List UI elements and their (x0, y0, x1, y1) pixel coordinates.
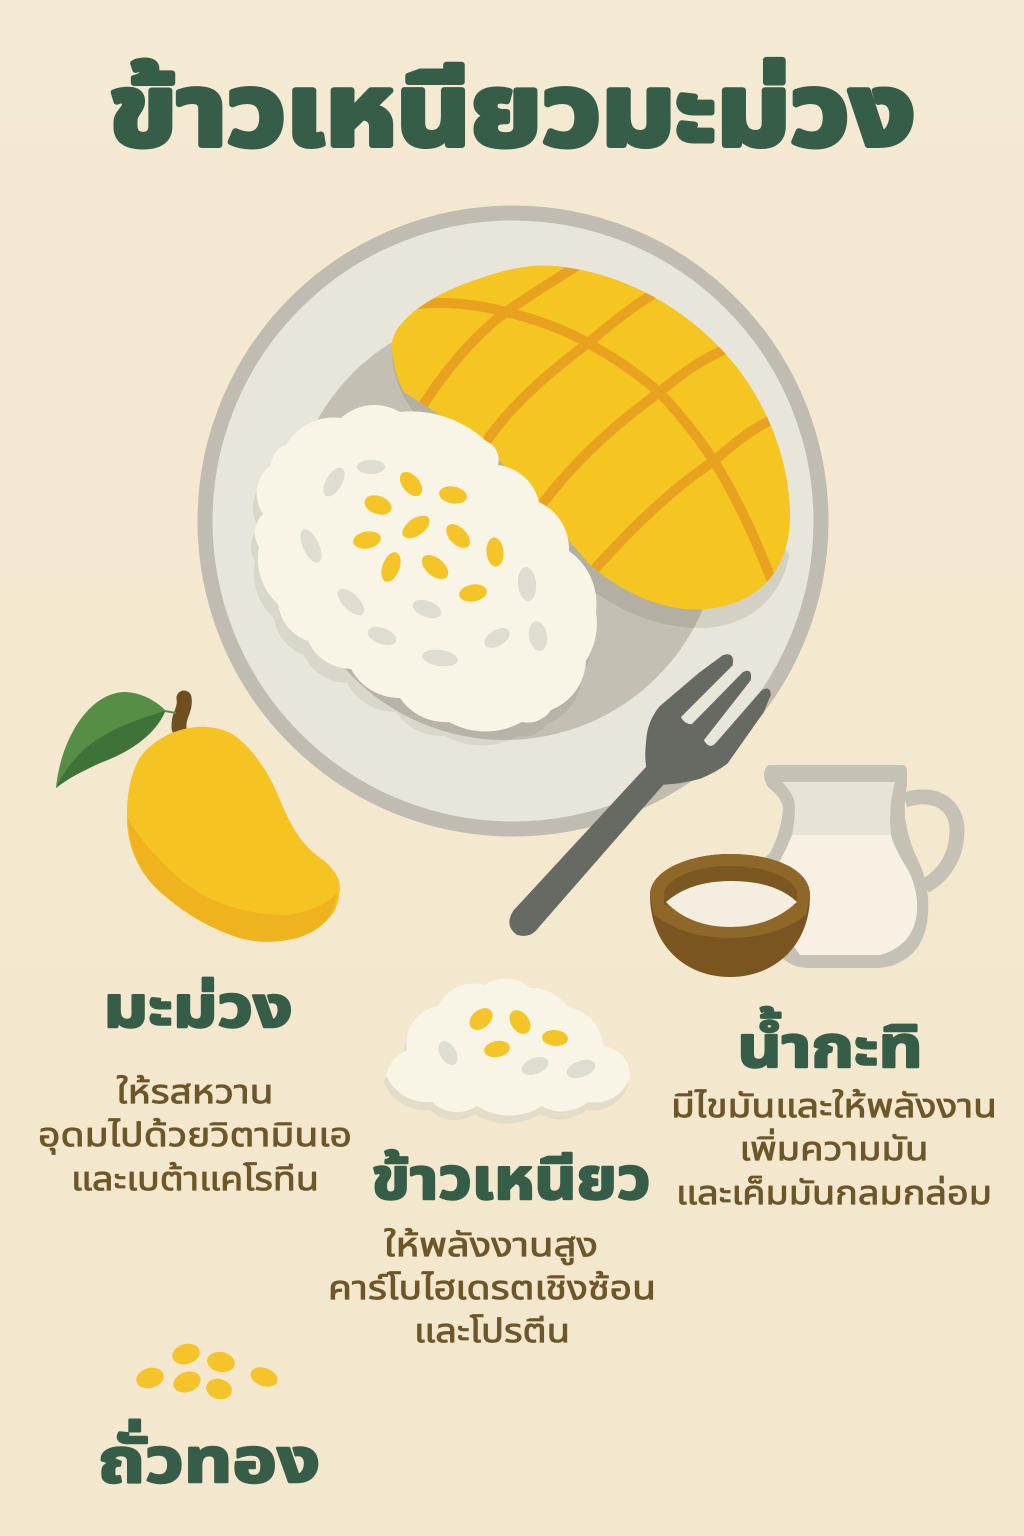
mango body (127, 727, 340, 942)
sticky rice mound (255, 405, 597, 731)
mango shadow (392, 345, 789, 628)
text: sticky rice description: และโปรตีน (414, 1312, 570, 1349)
heading: mung beans: ถั่วทอง (98, 1419, 320, 1496)
plate (205, 213, 821, 829)
heading: mango: มะม่วง (104, 975, 292, 1040)
whole mango with leaf (56, 692, 340, 942)
text: sticky rice description: คาร์โบไฮเดรตเชิงซ้อน (328, 1269, 656, 1306)
text: coconut milk description (671, 1087, 997, 1211)
text: coconut milk description: เพิ่มความมัน (740, 1128, 928, 1167)
heading: coconut milk: น้ำกะทิ (738, 1006, 922, 1080)
mung beans on rice (352, 468, 505, 604)
sticky rice shadow (251, 419, 593, 745)
text: coconut milk description: และเค็มมันกลมกล่อม (676, 1174, 992, 1211)
plate well (290, 310, 720, 740)
icon: small sticky rice mound (384, 979, 630, 1124)
text: sticky rice description: ให้พลังงานสูง (384, 1226, 598, 1265)
mango stem (179, 698, 184, 728)
text: coconut milk description: มีไขมันและให้พลังงาน (671, 1087, 997, 1124)
sliced mango (392, 265, 790, 609)
leaf (56, 692, 176, 788)
text: sticky rice description (328, 1226, 656, 1349)
text: mango description: ให้รสหวาน (116, 1073, 274, 1110)
text: mango description (38, 1073, 352, 1197)
title: ข้าวเหนียวมะม่วง (109, 55, 915, 167)
text: mango description: อุดมไปด้วยวิตามินเอ (38, 1116, 352, 1155)
heading: sticky rice: ข้าวเหนียว (372, 1147, 650, 1212)
icon: mung beans (134, 1341, 280, 1402)
text: mango description: และเบต้าแคโรทีน (71, 1160, 319, 1197)
fork (510, 655, 770, 935)
jug of coconut milk (740, 765, 957, 968)
coconut bowl (650, 854, 810, 977)
